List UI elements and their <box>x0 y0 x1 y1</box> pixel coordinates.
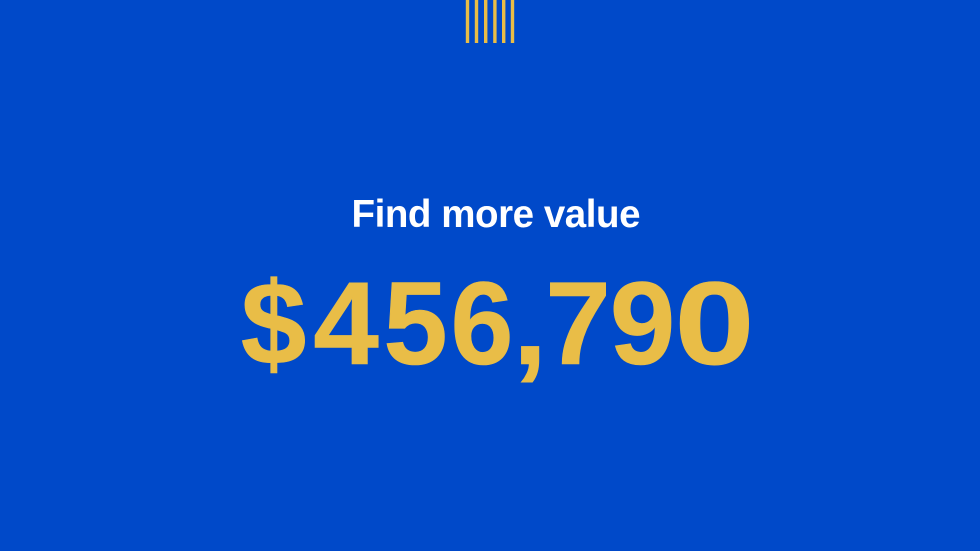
icon: six vertical gold stripes <box>466 0 514 43</box>
big value number: 5 <box>383 257 448 389</box>
big value number: 4 <box>313 258 379 390</box>
big value number: 7 <box>545 258 611 390</box>
big value number: 9 <box>610 258 675 390</box>
big value number: $ <box>241 258 306 390</box>
big value number: , <box>513 257 547 389</box>
heading: Find more value <box>352 193 640 236</box>
big value number: 0 <box>674 257 755 389</box>
big value number: 6 <box>450 257 514 390</box>
big value number <box>241 257 755 390</box>
